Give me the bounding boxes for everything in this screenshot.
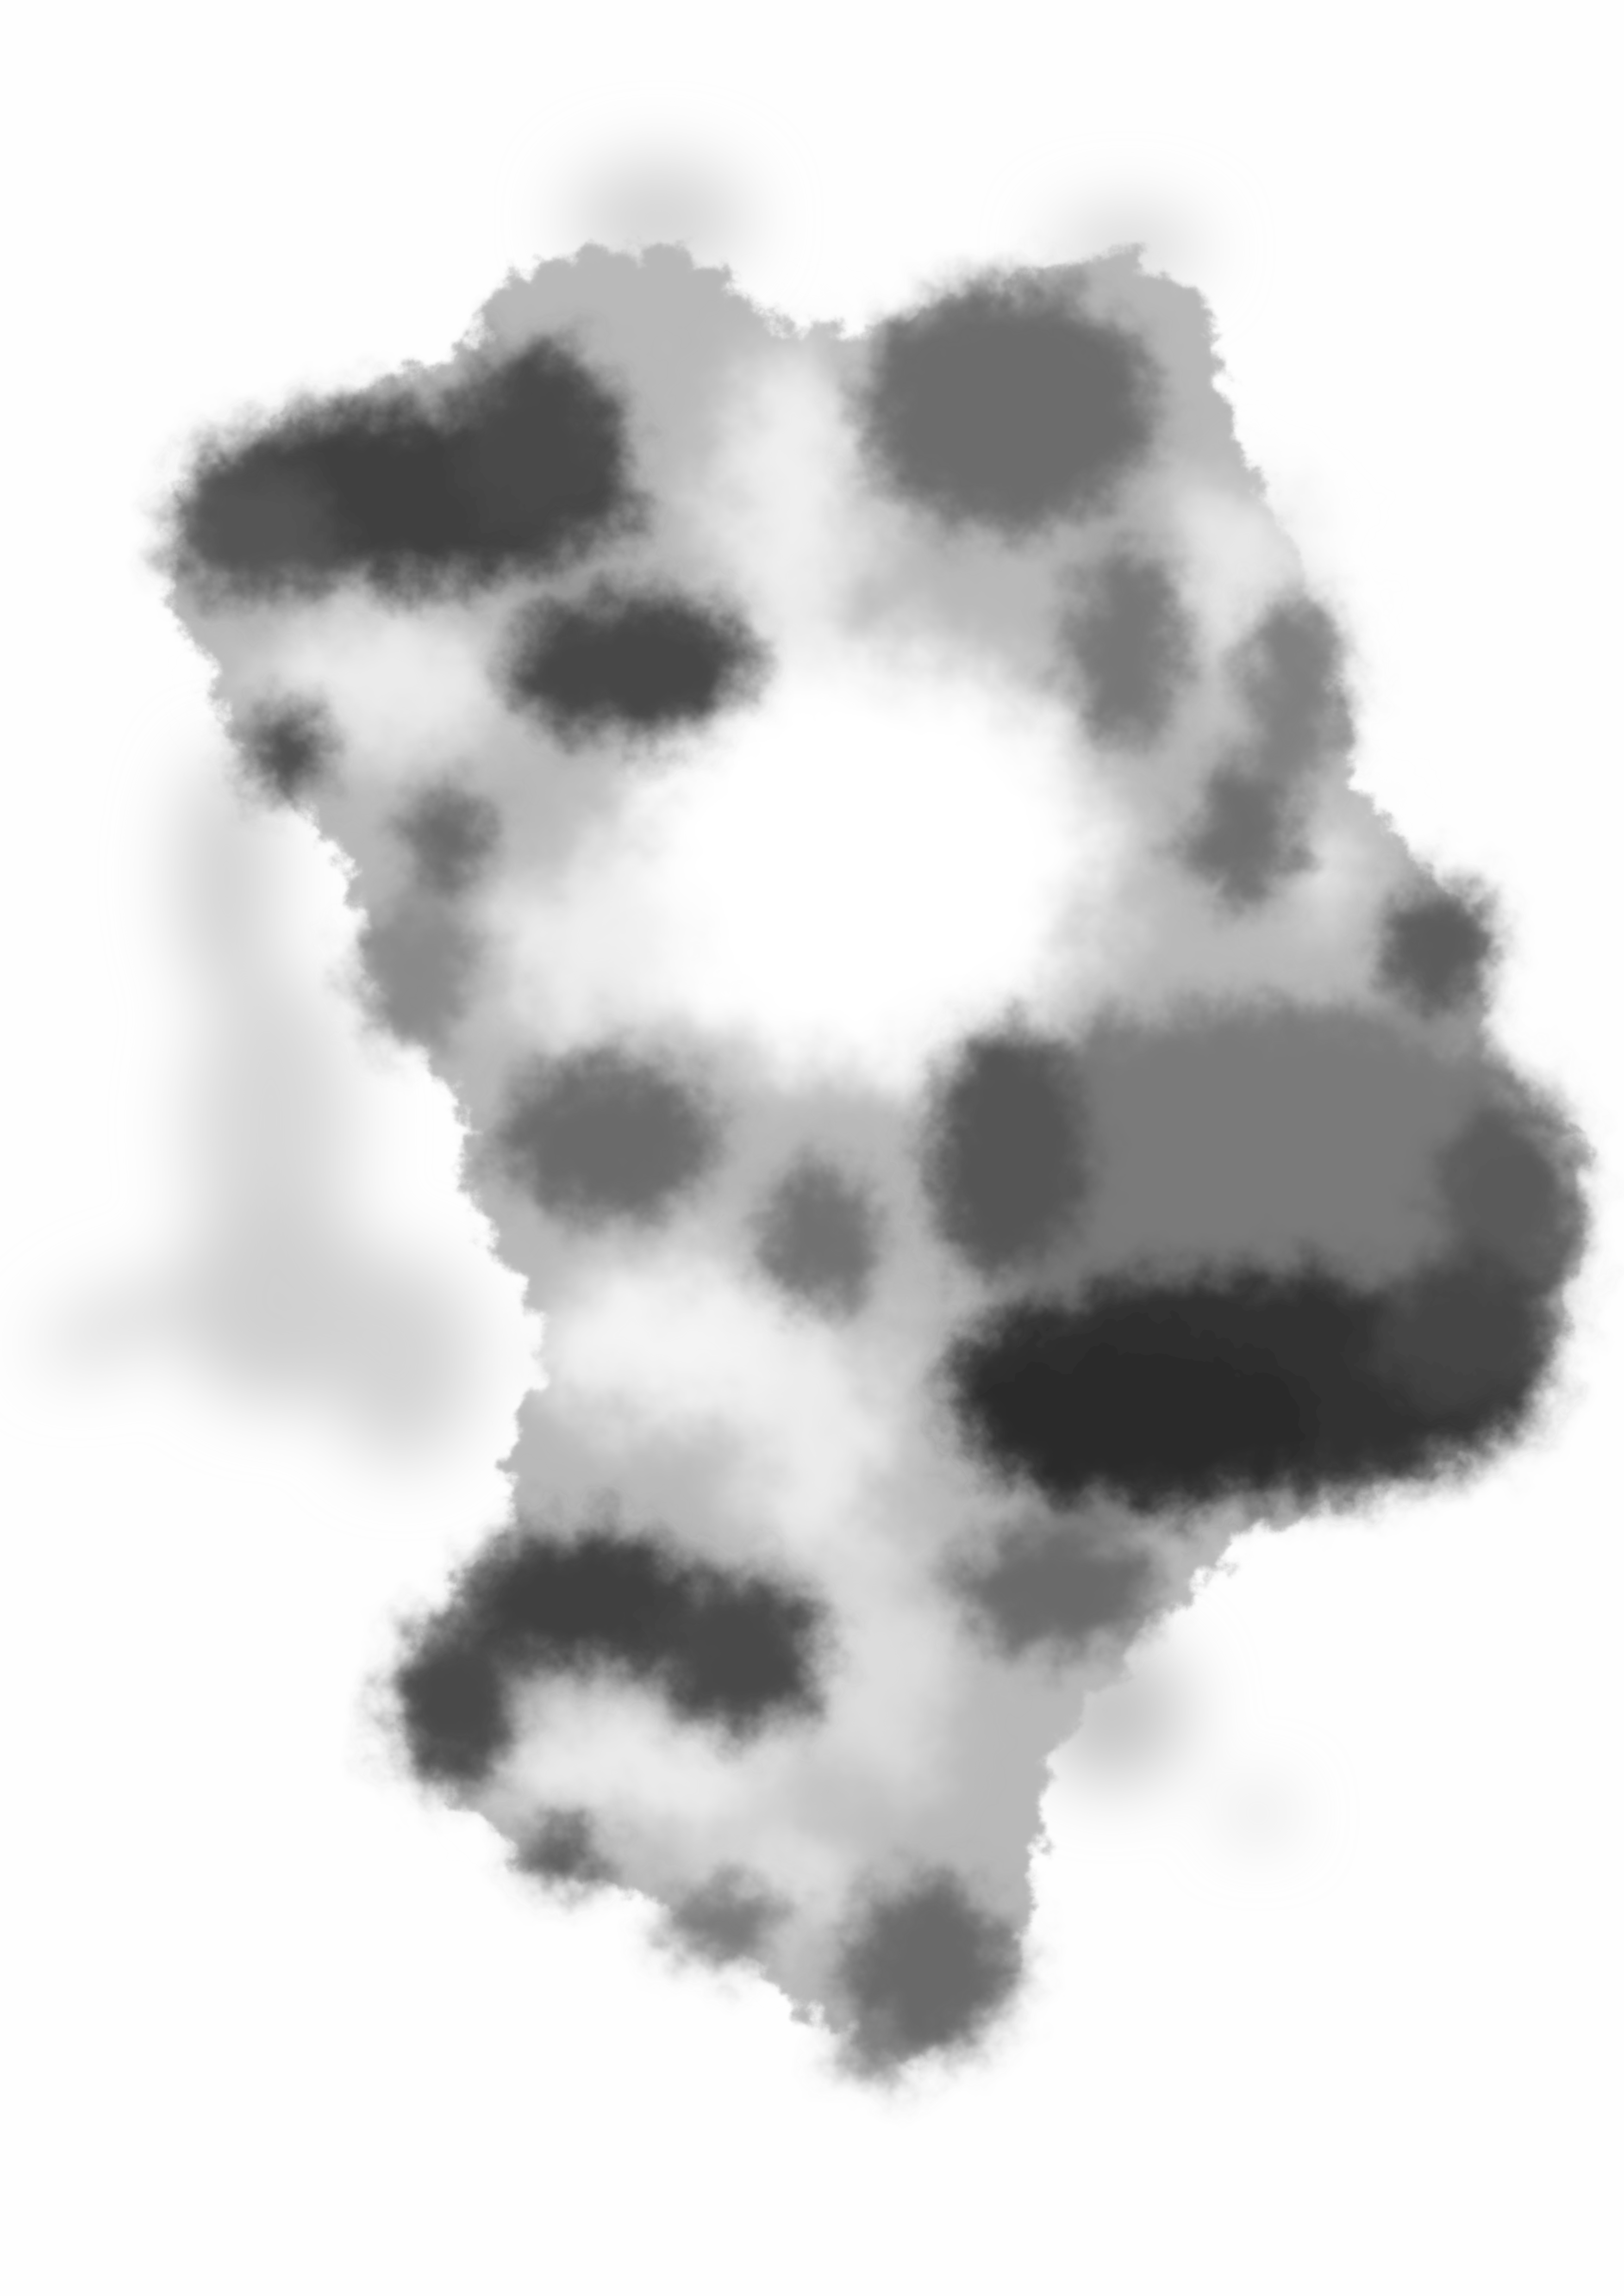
dark smoke: upper left	[175, 344, 754, 1045]
dark smoke: lower left	[392, 1528, 824, 1884]
dark smoke: middle left	[498, 1060, 878, 1309]
white central highlights	[249, 336, 1375, 1930]
dark smoke: large lower right mass	[929, 1002, 1580, 1653]
wispy top haze	[571, 161, 1285, 1834]
dark smoke: upper right	[863, 285, 1492, 1024]
cloud body silhouette	[169, 249, 1587, 2069]
dark smoke: bottom tail	[663, 1879, 1014, 2075]
faint left plume	[31, 753, 475, 1462]
